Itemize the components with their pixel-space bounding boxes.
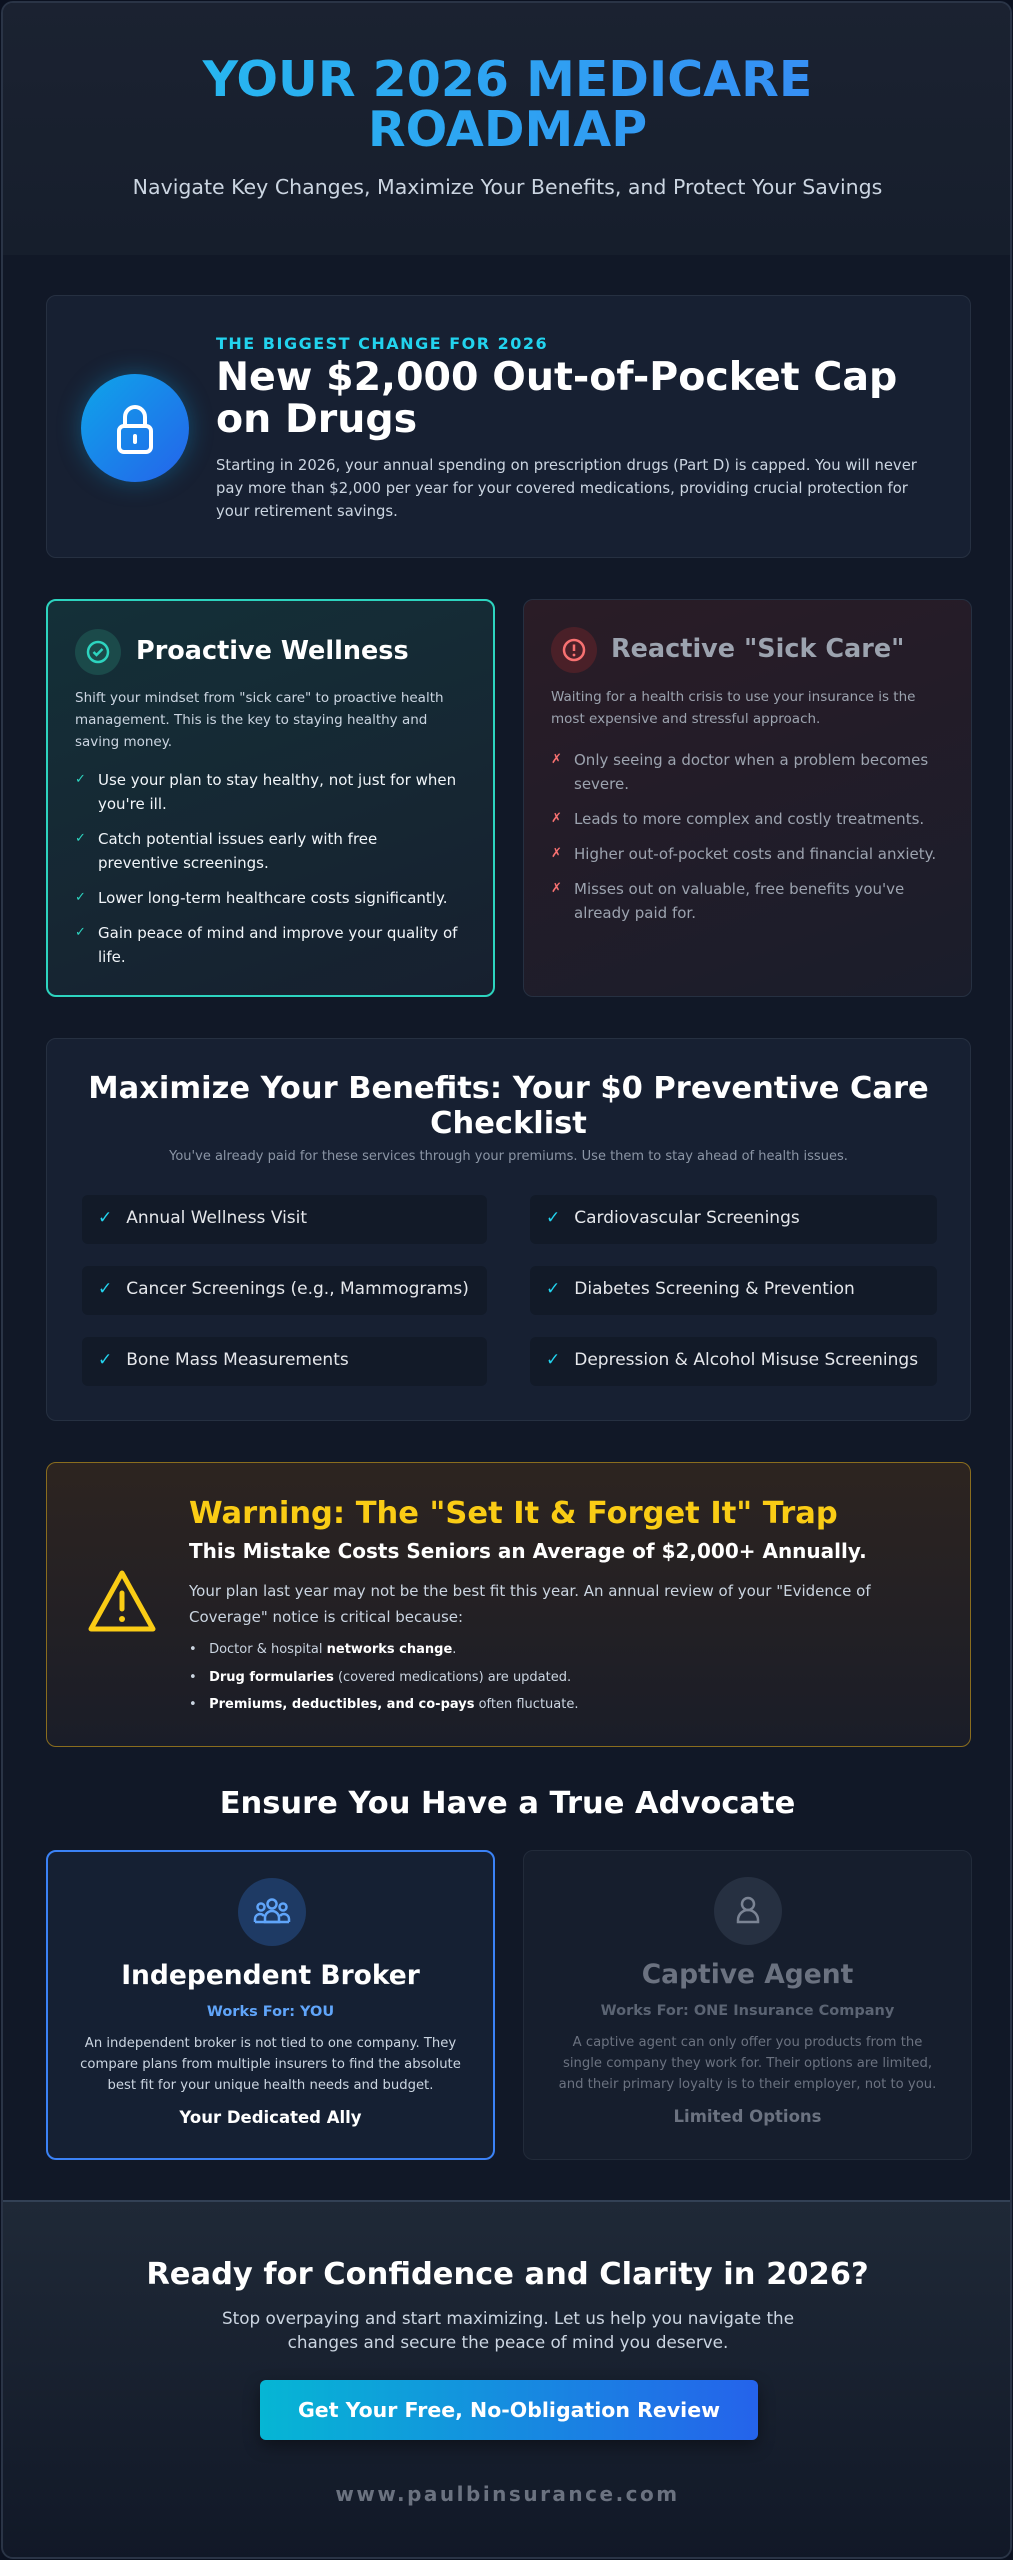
CTA text: Stop overpaying and start maximizing. Let us help you navigate the changes and secure the peace of mind you deserve. [222, 2308, 794, 2352]
icon: group [238, 1878, 306, 1946]
heading: New $2,000 Out-of-Pocket Cap on Drugs [216, 354, 897, 442]
icon: check circle [75, 629, 121, 675]
benefit list: ✓ [75, 831, 86, 846]
title: Captive Agent [642, 1959, 853, 1990]
heading: Reactive "Sick Care" [611, 634, 904, 664]
title: Independent Broker [121, 1960, 420, 1991]
benefit list: ✓ [75, 925, 86, 940]
checklist items: ✓ Bone Mass Measurements [98, 1350, 349, 1370]
checklist items: ✓ Depression & Alcohol Misuse Screenings [546, 1350, 918, 1370]
works for: Works For: YOU [207, 2004, 334, 2020]
panel: drug cap [46, 295, 971, 558]
icon: person [714, 1877, 782, 1945]
header [3, 3, 1013, 255]
checklist items [82, 1195, 937, 1386]
benefit list: Gain peace of mind and improve your quality of life. [98, 924, 457, 966]
risk list: Only seeing a doctor when a problem becomes severe. [574, 751, 928, 793]
reasons list [189, 1642, 578, 1712]
title: YOUR 2026 MEDICARE [203, 51, 812, 108]
heading: advocate: Ensure You Have a True Advocate [220, 1786, 795, 1821]
CTA heading: Ready for Confidence and Clarity in 2026? [146, 2257, 869, 2292]
risk list: Misses out on valuable, free benefits you've already paid for. [574, 880, 904, 922]
checklist items: ✓ Annual Wellness Visit [98, 1208, 307, 1228]
description: Waiting for a health crisis to use your insurance is the most expensive and stressful approach. [551, 689, 915, 727]
risk list: ✗ [551, 752, 562, 767]
reasons list: • Premiums, deductibles, and co-pays often fluctuate. [189, 1697, 578, 1712]
title [3, 55, 1012, 155]
panel: proactive wellness [46, 599, 495, 997]
subtitle: You've already paid for these services through your premiums. Use them to stay ahead of health issues. [169, 1149, 848, 1164]
body: Your plan last year may not be the best fit this year. An annual review of your "Evidence of Coverage" notice is critical because: [189, 1582, 871, 1626]
subheading: This Mistake Costs Seniors an Average of $2,000+ Annually. [189, 1539, 867, 1563]
panel: captive agent [523, 1850, 972, 2160]
benefit list: ✓ [75, 772, 86, 787]
button: Get Your Free, No-Obligation Review [298, 2398, 720, 2422]
checklist items: ✓ Cancer Screenings (e.g., Mammograms) [98, 1279, 469, 1299]
panel: preventive checklist [46, 1038, 971, 1421]
tag: Limited Options [674, 2107, 821, 2126]
risk list: ✗ [551, 846, 562, 861]
risk list: Leads to more complex and costly treatments. [574, 810, 924, 828]
footer CTA [3, 2200, 1013, 2560]
reasons list: • Drug formularies (covered medications) are updated. [189, 1670, 571, 1684]
checklist items: ✓ Diabetes Screening & Prevention [546, 1279, 855, 1299]
benefit list [75, 771, 458, 966]
description: A captive agent can only offer you products from the single company they work for. Their options are limited, and their primary loyalty is to their employer, not to you. [559, 2035, 936, 2092]
button [260, 2380, 758, 2440]
benefit list: Lower long-term healthcare costs significantly. [98, 889, 447, 907]
icon: lock [81, 374, 189, 482]
website: www.paulbinsurance.com [335, 2482, 680, 2506]
checklist items: ✓ Cardiovascular Screenings [546, 1208, 800, 1228]
heading: Proactive Wellness [136, 636, 409, 666]
works for: Works For: ONE Insurance Company [601, 2003, 894, 2019]
title: ROADMAP [368, 101, 647, 158]
description: An independent broker is not tied to one company. They compare plans from multiple insurers to find the absolute best fit for your unique health needs and budget. [80, 2036, 461, 2093]
description: Shift your mindset from "sick care" to proactive health management. This is the key to staying healthy and saving money. [75, 690, 444, 750]
benefit list: Use your plan to stay healthy, not just for when you're ill. [98, 771, 456, 813]
heading: Warning: The "Set It & Forget It" Trap [189, 1496, 838, 1531]
benefit list: Catch potential issues early with free preventive screenings. [98, 830, 377, 872]
risk list: Higher out-of-pocket costs and financial anxiety. [574, 845, 936, 863]
risk list [551, 751, 936, 922]
heading [88, 1071, 929, 1141]
reasons list: • Doctor & hospital networks change. [189, 1642, 456, 1657]
panel: warning [46, 1462, 971, 1747]
benefit list: ✓ [75, 890, 86, 905]
body text: Starting in 2026, your annual spending on prescription drugs (Part D) is capped. You will never pay more than $2,000 per year for your covered medications, providing crucial protection for your retirement savings. [216, 457, 917, 520]
tag: Your Dedicated Ally [179, 2108, 362, 2127]
heading: Checklist [430, 1106, 587, 1141]
panel: independent broker [46, 1850, 495, 2160]
risk list: ✗ [551, 811, 562, 826]
heading: Maximize Your Benefits: Your $0 Preventive Care [88, 1071, 929, 1106]
panel: reactive sick care [523, 599, 972, 997]
subtitle: Navigate Key Changes, Maximize Your Benefits, and Protect Your Savings [133, 175, 882, 199]
icon: warning triangle [88, 1570, 156, 1632]
label: THE BIGGEST CHANGE FOR 2026 [216, 334, 548, 353]
risk list: ✗ [551, 881, 562, 896]
icon: alert circle [551, 627, 597, 673]
